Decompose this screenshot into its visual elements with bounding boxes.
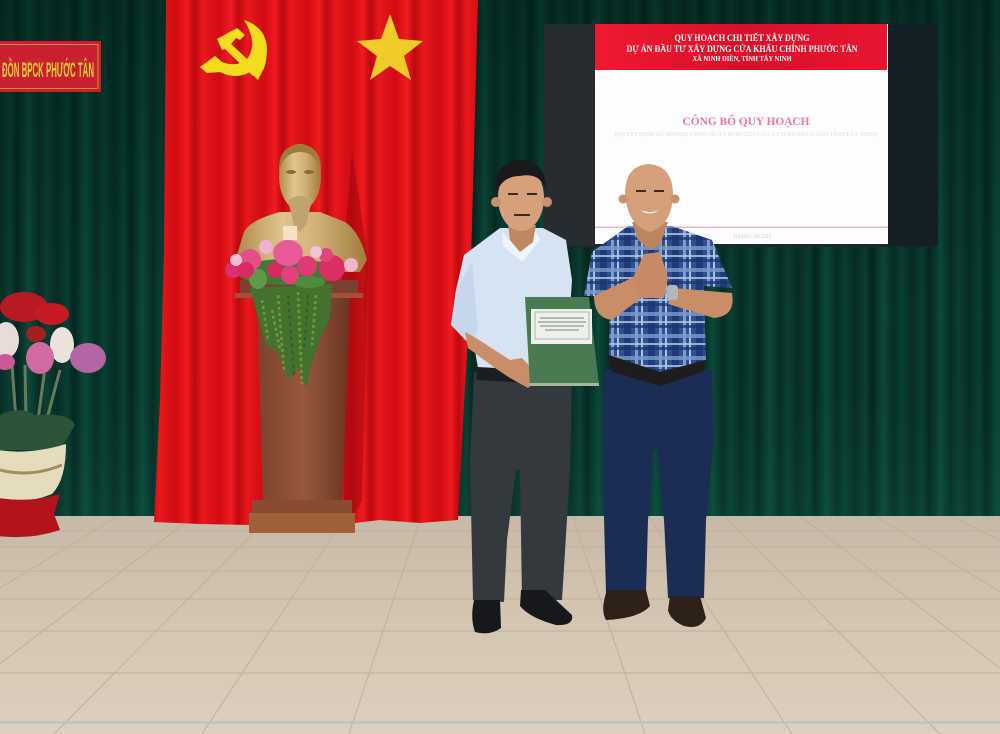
head xyxy=(498,165,544,231)
vase xyxy=(0,444,66,502)
wristwatch xyxy=(667,285,678,300)
neck xyxy=(508,225,536,252)
icon: gold star xyxy=(357,14,423,80)
vase stand xyxy=(0,494,60,537)
shoes xyxy=(472,590,572,633)
neck xyxy=(632,222,668,250)
greenery on lectern xyxy=(250,284,332,388)
hair xyxy=(496,160,546,194)
forearms xyxy=(594,274,645,320)
leaves xyxy=(0,410,75,450)
man on the left holding folder xyxy=(451,160,572,633)
slide subtitle: (QUYẾT ĐỊNH SỐ 0000/QĐ-UBND NGÀY 01/09/2025 CỦA ỦY BAN NHÂN DÂN TỈNH TÂY NINH) xyxy=(615,130,877,138)
navy trousers xyxy=(603,370,714,598)
belt xyxy=(476,367,537,383)
trousers xyxy=(470,372,572,602)
projection screen xyxy=(544,24,938,247)
red curtain xyxy=(154,0,478,526)
slide header text: DỰ ÁN ĐẦU TƯ XÂY DỰNG CỬA KHẨU CHÍNH PHƯỚC TÂN xyxy=(626,42,858,55)
shirt xyxy=(451,228,572,370)
slide header text: XÃ NINH ĐIỀN, TỈNH TÂY NINH xyxy=(692,53,792,63)
green velvet curtain backdrop xyxy=(0,0,1000,525)
icon: hammer and sickle xyxy=(200,20,267,80)
clapping hands xyxy=(632,252,668,298)
tiled floor xyxy=(0,516,1000,734)
man on the right in plaid shirt xyxy=(584,164,733,627)
slide header text: QUY HOẠCH CHI TIẾT XÂY DỰNG xyxy=(674,31,810,44)
potted flowers xyxy=(0,292,106,537)
slide date: THÁNG 09/2025 xyxy=(733,232,772,240)
green document folder xyxy=(525,297,599,386)
folder label xyxy=(531,309,592,344)
photo scene: planning announcement ceremony: ĐỒN BPCK PHƯỚC TÂN xyxy=(2,58,94,82)
facial features xyxy=(508,194,537,215)
blossoms xyxy=(0,292,106,374)
stems xyxy=(12,365,60,420)
lotus flower arrangement xyxy=(225,240,358,289)
slide title: CÔNG BỐ QUY HOẠCH xyxy=(682,113,810,128)
wall banner: ĐỒN BPCK PHƯỚC TÂN xyxy=(0,41,101,92)
lectern xyxy=(235,280,363,533)
arm and hand xyxy=(465,332,541,388)
golden bust of Ho Chi Minh xyxy=(236,144,367,272)
plaid shirt xyxy=(584,226,732,372)
shoes xyxy=(603,590,706,627)
belt xyxy=(607,356,706,386)
bald head xyxy=(625,164,673,232)
slide header text xyxy=(626,31,858,63)
